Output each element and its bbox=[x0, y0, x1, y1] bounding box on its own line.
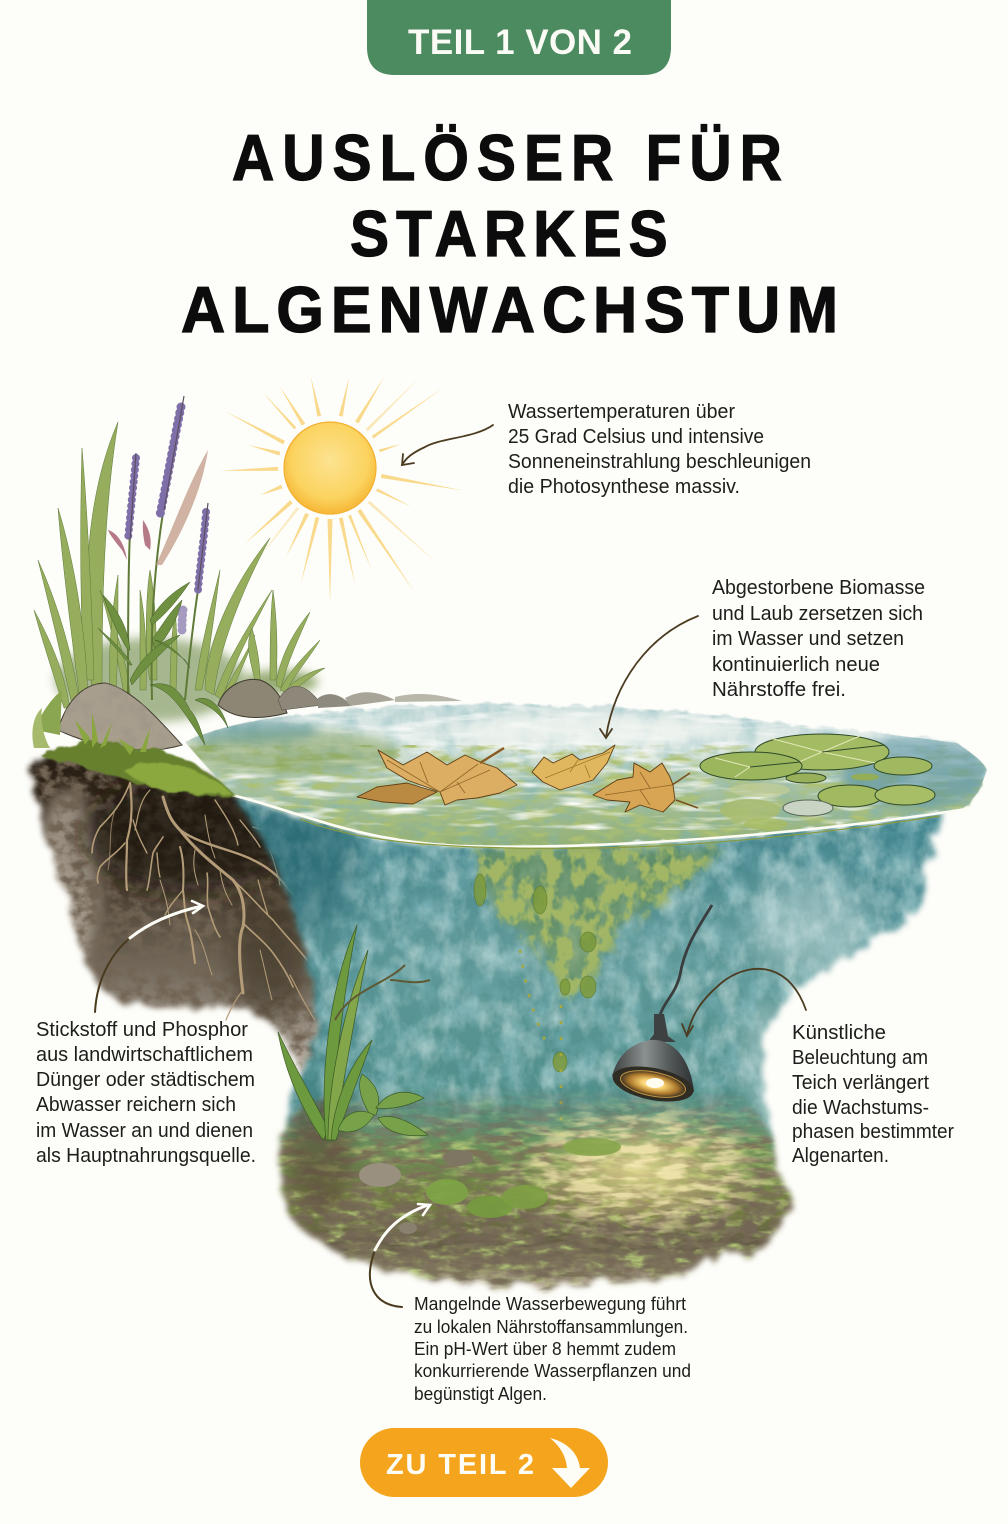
pad: large bbox=[755, 734, 889, 770]
title: ALGENWACHSTUM bbox=[181, 274, 838, 346]
title bbox=[181, 122, 838, 346]
text block: sun and temperature: 25 Grad Celsius und intensive bbox=[508, 426, 764, 448]
grass and moss on the bank bbox=[32, 690, 235, 796]
text block: stagnant water and pH: konkurrierende Wasserpflanzen und bbox=[414, 1361, 691, 1381]
button: zu Teil 2 bbox=[360, 1428, 608, 1497]
text block: nutrients: als Hauptnahrungsquelle. bbox=[36, 1145, 256, 1167]
arrow: pond bed bbox=[370, 1204, 430, 1307]
text block: sun and temperature bbox=[508, 401, 811, 498]
text block: sun and temperature: die Photosynthese massiv. bbox=[508, 476, 740, 498]
underwater lamp bbox=[610, 905, 712, 1108]
leaf: large bbox=[378, 748, 517, 805]
pad: left bbox=[700, 752, 802, 780]
arrow: lamp bbox=[682, 969, 806, 1036]
icon: sun with rays bbox=[220, 376, 463, 603]
text block: artificial light: Teich verlängert bbox=[792, 1072, 929, 1094]
title: STARKES bbox=[350, 198, 668, 271]
text block: biomass bbox=[712, 577, 925, 701]
text block: stagnant water and pH: Ein pH-Wert über 8 hemmt zudem bbox=[414, 1339, 676, 1359]
lily pads bbox=[700, 734, 935, 830]
text block: sun and temperature: Sonneneinstrahlung beschleunigen bbox=[508, 451, 811, 473]
text block: artificial light: Algenarten. bbox=[792, 1145, 889, 1167]
text block: artificial light: Beleuchtung am bbox=[792, 1047, 928, 1069]
text block: biomass: und Laub zersetzen sich bbox=[712, 603, 923, 625]
text block: stagnant water and pH: zu lokalen Nährstoffansammlungen. bbox=[414, 1317, 688, 1337]
text block: nutrients: Dünger oder städtischem bbox=[36, 1069, 255, 1091]
floating leaves bbox=[357, 745, 698, 812]
text block: nutrients: Stickstoff und Phosphor bbox=[36, 1019, 248, 1041]
reeds and flowering plants bbox=[34, 396, 325, 745]
underwater plant bbox=[278, 925, 430, 1140]
text block: nutrients bbox=[36, 1019, 256, 1167]
soil bank with roots bbox=[24, 743, 322, 1076]
text block: sun and temperature: Wassertemperaturen über bbox=[508, 401, 735, 423]
text block: biomass: im Wasser und setzen bbox=[712, 628, 904, 650]
text block: biomass: kontinuierlich neue bbox=[712, 654, 880, 676]
text block: stagnant water and pH: Mangelnde Wasserbewegung führt bbox=[414, 1294, 686, 1314]
text block: nutrients: im Wasser an und dienen bbox=[36, 1120, 253, 1142]
text block: biomass: Nährstoffe frei. bbox=[712, 679, 846, 701]
leaf: right bbox=[593, 763, 698, 812]
arrow: roots bbox=[95, 901, 203, 1012]
text block: artificial light bbox=[792, 1022, 954, 1167]
button: zu Teil 2: ZU TEIL 2 bbox=[386, 1449, 534, 1481]
water body cross-section bbox=[232, 797, 946, 1163]
hanging algae bbox=[470, 840, 724, 1120]
arrow: leaves bbox=[600, 616, 698, 738]
text block: artificial light: Künstliche bbox=[792, 1022, 886, 1044]
text block: nutrients: Abwasser reichern sich bbox=[36, 1094, 236, 1116]
text block: artificial light: phasen bestimmter bbox=[792, 1121, 954, 1143]
badge: Teil 1 von 2 bbox=[367, 0, 671, 75]
text block: nutrients: aus landwirtschaftlichem bbox=[36, 1044, 253, 1066]
leaf: middle bbox=[532, 745, 615, 790]
rocks on the bank bbox=[50, 679, 462, 755]
icon: curved arrow bbox=[550, 1438, 590, 1488]
arrows bbox=[95, 425, 806, 1307]
leaf: under bbox=[357, 783, 437, 804]
pond surface bbox=[180, 700, 990, 855]
text block: stagnant water and pH: begünstigt Algen. bbox=[414, 1384, 547, 1404]
arrow: sun bbox=[402, 425, 493, 465]
badge: Teil 1 von 2: TEIL 1 VON 2 bbox=[408, 23, 632, 62]
text block: biomass: Abgestorbene Biomasse bbox=[712, 577, 925, 599]
algae clumps and pebbles bbox=[359, 1138, 621, 1234]
text block: stagnant water and pH bbox=[414, 1294, 691, 1404]
title: AUSLÖSER FÜR bbox=[232, 122, 782, 195]
roots bbox=[92, 783, 327, 1020]
pond bed with sediment bbox=[274, 1090, 798, 1295]
text block: artificial light: die Wachstums- bbox=[792, 1097, 929, 1119]
